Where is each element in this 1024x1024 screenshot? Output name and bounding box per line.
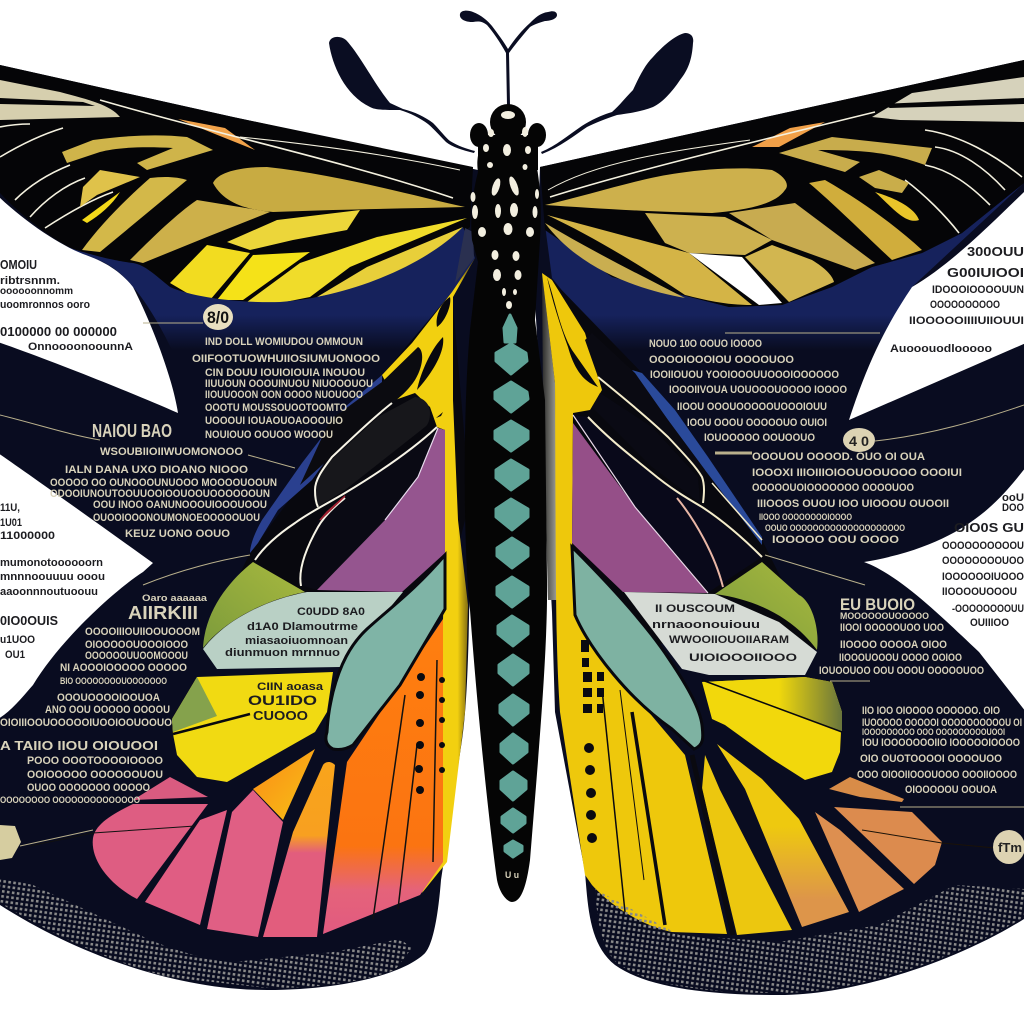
thorax spots <box>470 111 539 309</box>
head <box>490 104 526 140</box>
right wing silhouette <box>535 60 1024 995</box>
right cream lines <box>588 377 762 587</box>
left long club <box>329 37 475 153</box>
left gold stripe <box>82 177 187 252</box>
right white panel upper text: IIOOOOOIIIIUIIOUUI <box>909 315 1024 327</box>
left wing <box>0 65 478 990</box>
left white panel lower text: mumonotoooooorn <box>0 557 103 569</box>
right dots <box>581 640 604 843</box>
left grey body-side sheen <box>455 228 474 283</box>
right lower gold 4 <box>745 245 834 302</box>
left gold cell lower <box>130 200 270 263</box>
left white panel lower text: 0IO0OUIS <box>0 613 58 628</box>
left yellow panel <box>172 672 333 782</box>
left dark panel middle text: OUOOIOOONOUMONOEOOOOOUOU <box>93 512 260 524</box>
right forewing black field <box>540 60 1024 307</box>
left dark panel upper text: OOOTU MOUSSOUOOTOOMTO <box>205 402 347 414</box>
left small black veins <box>417 297 450 418</box>
right lower gold 1 <box>545 223 685 298</box>
antennae and head clubs <box>329 11 693 154</box>
right grey panel text: WWOOIIOUOIIARAM <box>669 634 789 646</box>
right grey panel text: II OUSCOUM <box>655 603 735 615</box>
left dark panel lower text: A TAIIO IIOU OIOUOOI <box>0 738 158 753</box>
left white panel lower text: 11U, <box>0 502 20 514</box>
right yellow base <box>542 273 727 934</box>
left purple edge line <box>385 428 438 520</box>
right dark panel middle text: IOOOXI IIIOIIIOIOOUOOUOOO OOOIUI <box>752 467 962 479</box>
right badge top <box>843 428 875 452</box>
left forewing dark stripe <box>0 98 95 106</box>
right black vein <box>547 277 598 387</box>
right veins in yellow <box>602 689 733 935</box>
left dark panel middle text: WSOUBIIOIIWUOMONOOO <box>100 446 243 458</box>
left dark panel middle text: KEUZ UONO OOUO <box>125 528 230 540</box>
right white panel upper text: 300OUU <box>967 244 1024 259</box>
right badge bottom label: fTm <box>998 840 1022 855</box>
left dark panel lower text: OIOOOOOUOOOIOOO <box>85 639 188 651</box>
left dark panel middle text: NAIOU BAO <box>92 421 172 441</box>
left white outlines <box>255 403 437 586</box>
left dots <box>415 673 445 794</box>
left grey panel text: d1A0 Dlamoutrme <box>247 621 358 633</box>
left forewing black field <box>0 65 473 303</box>
left cell A <box>314 397 430 507</box>
left dark panel upper text: OIIFOOTUOWHUIIOSIUMUONOOO <box>192 353 380 365</box>
left dark panel lower text <box>0 593 208 805</box>
right mesh band <box>595 885 1024 993</box>
right white panel lower text: IIOOOOUOOOU <box>942 586 1017 598</box>
left grey panel text: miasaoiuomnoan <box>245 635 348 647</box>
left pink cells <box>93 619 443 937</box>
right dark panel lower text: IIOOI OOOOOUOO UOO <box>840 622 944 634</box>
right white gap lower <box>864 467 1024 712</box>
right dark panel lower text: IIOOOUOOOU OOOO OOIOO <box>839 652 962 664</box>
right leader lines <box>715 333 1024 807</box>
right dark panel middle text: IIIOOOS OUOU IOO UIOOOU OUOOII <box>757 498 949 510</box>
right cell B <box>573 415 762 592</box>
right dark panel upper text: IOOOIIVOUA UOUOOOUOOOO IOOOO <box>669 384 847 396</box>
right wing <box>535 60 1024 995</box>
right dark panel lower text: MOOOOOOUOOOOO <box>840 611 929 621</box>
left dark panel lower text: BIO OOOOOOOOUOOOOOOO <box>60 676 167 686</box>
right yellow cells <box>702 744 942 935</box>
left eye <box>470 123 488 147</box>
right gold 2 <box>645 213 772 255</box>
left vein thin in pink <box>30 826 195 846</box>
left dark panel lower text: OOOOIIIOUIIOOUOOOM <box>85 626 200 638</box>
left cell B dark <box>300 428 437 590</box>
left green wedge <box>172 677 217 732</box>
left callout badge top <box>203 304 233 330</box>
right top black cell <box>585 333 705 493</box>
right dark panel middle text: OOOUOU OOOOD. OUO OI OUA <box>752 451 925 463</box>
left yellow stripe <box>382 258 475 893</box>
right gold stripe <box>809 180 922 260</box>
left dark panel middle text: ODOOIUNOUTOOUUOOIOOUOOUOOOOOOUN <box>50 488 270 500</box>
body <box>465 104 547 902</box>
left leader lines <box>0 323 295 846</box>
left yellow cells <box>170 210 467 303</box>
left white panel upper text: ribtrsnnm. <box>0 275 60 287</box>
right cream patch <box>872 77 1024 122</box>
left dark panel upper text: IIUUOUN OOOUINUOU NIUOOOUOU <box>205 378 373 390</box>
right long club <box>541 33 693 154</box>
right dark panel lower text: IOUOOUOO OOU OOOU OOOOOUOO <box>819 665 984 677</box>
right ribs <box>548 112 1022 233</box>
left gold cell big <box>213 167 465 212</box>
left dark panel upper text: IIOUUOOON OON OOOO NUOUOOO <box>205 389 363 401</box>
right dark panel upper text: IIOOU OOOUOOOOOUOOOIOUU <box>677 401 827 413</box>
right navy band <box>545 183 1024 350</box>
right dark panel middle text <box>752 451 962 546</box>
abdomen tip label: U u <box>505 870 519 880</box>
right white panel lower text: OUIIIOO <box>970 617 1009 629</box>
right dark panel upper text: OOOOIOOOIOU OOOOUOO <box>649 354 794 366</box>
left purple cell <box>317 428 445 592</box>
left white panel lower text: aaoonnnoutuoouu <box>0 586 98 598</box>
left orange patch <box>178 119 255 150</box>
left white panel lower text: 11000000 <box>0 530 55 542</box>
right dark panel lower text: IIOOOO OOOOA OIOO <box>840 639 947 651</box>
left red accent <box>320 496 345 520</box>
right grey panel <box>624 592 817 675</box>
left gold cell mid <box>80 170 140 207</box>
left dark panel lower text: OOOUOOOOIOOUOA <box>57 692 160 704</box>
right dark panel upper text: NOUO 10O OOUO IOOOO <box>649 338 762 350</box>
right dark panel upper text: IOUOOOOO OOUOOUO <box>704 432 815 444</box>
right grey panel text: nrnaoonouiouu <box>652 619 760 631</box>
left white panel upper text: uoomronnos ooro <box>0 299 90 311</box>
right dark panel upper text <box>649 338 847 444</box>
left yellow panel text <box>248 681 324 723</box>
left olive cell <box>203 562 305 648</box>
left dark panel lower text: OOIOOOOO OOOOOOUOU <box>27 769 163 781</box>
left dark panel middle text: OOU INOO OANUNOOOUIOOOUOOU <box>93 499 267 511</box>
thorax neck <box>478 135 538 170</box>
right white gap upper <box>849 190 1024 420</box>
left grey panel text: C0UDD 8A0 <box>297 606 365 618</box>
right white panel lower text <box>942 492 1024 629</box>
right eye <box>528 123 546 147</box>
right dark panel middle text: OOOOOUOIOOOOOOO OOOOUOO <box>752 482 914 494</box>
left yellow drop <box>82 192 120 223</box>
left forewing ribs <box>0 100 460 228</box>
left yellow panel text: OU1IDO <box>248 692 317 708</box>
right white panel lower text: ooU <box>1002 492 1024 504</box>
right vein thin <box>862 830 995 848</box>
right yellow panel line <box>702 680 842 732</box>
left dark panel lower text: Oaro aaaaaa <box>142 593 208 603</box>
left white panel lower text <box>0 502 105 661</box>
left yellow panel text: CUOOO <box>253 708 308 723</box>
left white panel upper text <box>0 257 133 353</box>
right purple edge line <box>573 415 708 593</box>
right dark panel middle text: IIOOO OOOOOOOOIOOOO <box>759 512 852 522</box>
left dark panel upper text: UOOOUI IOUAOUOAOOOUIO <box>205 415 343 427</box>
left grey panel <box>203 592 403 669</box>
antenna stalks and tips <box>460 11 557 105</box>
left veins in orange <box>373 660 437 919</box>
left white panel upper text: 0100000 00 000000 <box>0 324 117 339</box>
left white panel upper text: oooooonnomm <box>0 286 73 297</box>
right dark panel middle text: IOOOOO OOU OOOO <box>772 534 900 546</box>
right purple cell <box>572 423 708 593</box>
left white panel lower text: 1U01 <box>0 517 22 529</box>
right white panel upper text: G00IUIOOI <box>947 265 1024 280</box>
right grey body edge <box>542 273 558 600</box>
left blue edge <box>250 375 382 553</box>
right dark panel lower text: EU BUOIO <box>840 595 915 614</box>
left navy under forewing <box>40 227 475 378</box>
left white gap upper <box>0 196 178 413</box>
left teal leaf <box>326 555 445 750</box>
right gold top <box>779 137 932 172</box>
right gold big <box>545 168 787 213</box>
right olive cell <box>715 562 818 650</box>
right dark panel upper text: IOOU OOOU OOOOOUO OUIOI <box>687 417 827 429</box>
left forewing cream patch <box>0 80 120 120</box>
right grey panel text: UIOIOOOIIOOO <box>689 652 798 664</box>
right white panel lower text: OIO0S GU <box>954 520 1024 535</box>
left wing silhouette <box>0 65 478 990</box>
left dark panel lower text: AIIRKIII <box>128 603 198 623</box>
right yellow panel upper wedge <box>702 677 842 732</box>
right gold 3 <box>729 203 875 270</box>
left grey panel text: diunmuon mrnnuo <box>225 647 340 659</box>
left dark panel upper text: CIN DOUU IOUIOIOUIA INOUOU <box>205 367 365 379</box>
left dark panel lower text: OOOOOOUUOOMOOOU <box>85 650 188 662</box>
left white panel upper text: OnnoooonoounnA <box>28 341 133 353</box>
body silhouette <box>465 150 547 902</box>
right orange patch <box>752 122 825 147</box>
right yellow drop <box>875 192 919 221</box>
right lower gold 2 <box>547 215 752 305</box>
left dark panel lower text: OIOIIIOOUOOOOOIUOOIOOUOOUO <box>0 717 172 729</box>
left white panel lower text: OU1 <box>5 649 25 661</box>
right white panel upper text: Auooouodlooooo <box>890 343 992 355</box>
right grey panel text <box>652 603 798 664</box>
left dark panel lower text: ANO OOU OOOOO OOOOU <box>45 704 170 716</box>
right dark stripe <box>880 98 1024 108</box>
left dark panel lower text: NI AOOOIOOOOO OOOOO <box>60 662 187 674</box>
left badge top label: 8/0 <box>207 308 229 327</box>
right blue edge <box>632 370 762 545</box>
left dark panel middle text <box>50 421 277 540</box>
right dark panel lower text: OIO OUOTOOOOI OOOOUOO <box>860 753 1002 765</box>
left white gap lower <box>0 453 153 719</box>
left dark panel upper text <box>192 336 380 441</box>
right inner hindwing field <box>552 280 817 650</box>
left white panel lower text: u1UOO <box>0 634 35 646</box>
left dark panel upper text: IND DOLL WOMIUDOU OMMOUN <box>205 336 363 348</box>
left grey panel text <box>225 606 365 659</box>
right white panel upper text: OOOOOOOOOO <box>930 299 1000 311</box>
left gold cell upper <box>62 135 213 170</box>
left dark panel lower text: OOOOOOOO OOOOOOOOOOOOOO <box>0 795 140 805</box>
left inner hindwing field <box>205 293 470 645</box>
left white panel upper text: OMOIU <box>0 257 37 272</box>
teal abdomen segments <box>495 315 528 857</box>
right badge top label: 4 0 <box>849 433 869 449</box>
right white panel upper text <box>890 244 1024 355</box>
right dark panel lower text: OIOOOOOU OOUOA <box>905 784 997 796</box>
right dark panel lower text <box>819 595 1022 796</box>
right dark panel upper text: IOOIIOUOU YOOIOOOUUOOOIOOOOOO <box>650 369 839 381</box>
right dark panel middle text: OOUO OOOOOOOOOOOOOOOOOOOO <box>765 523 905 533</box>
left dark panel middle text: OOOOO OO OUNOOOUNUOOO MOOOOUOOUN <box>50 477 277 489</box>
right badge bottom <box>993 830 1024 864</box>
right yellow panel <box>702 677 842 780</box>
left dark panel middle text: IALN DANA UXO DIOANO NIOOO <box>65 464 248 476</box>
left dark panel upper text: NOUIOUO OOUOO WOOOU <box>205 429 333 441</box>
left yellow panel line <box>173 714 250 734</box>
left badge bottom <box>0 825 21 860</box>
right teal leaf <box>572 547 703 749</box>
left yellow panel text: CIIN aoasa <box>257 681 324 693</box>
right cell A <box>592 393 700 503</box>
left mesh band <box>0 878 412 988</box>
left dark panel lower text: POOO OOOTOOOOIOOOO <box>27 755 163 767</box>
left dark panel lower text: OUOO OOOOOOO OOOOO <box>27 782 150 794</box>
right white cell <box>689 253 782 305</box>
left top black cell <box>300 347 422 485</box>
right gold small <box>859 170 909 193</box>
left white panel lower text: mnnnoouuuu ooou <box>0 571 105 583</box>
